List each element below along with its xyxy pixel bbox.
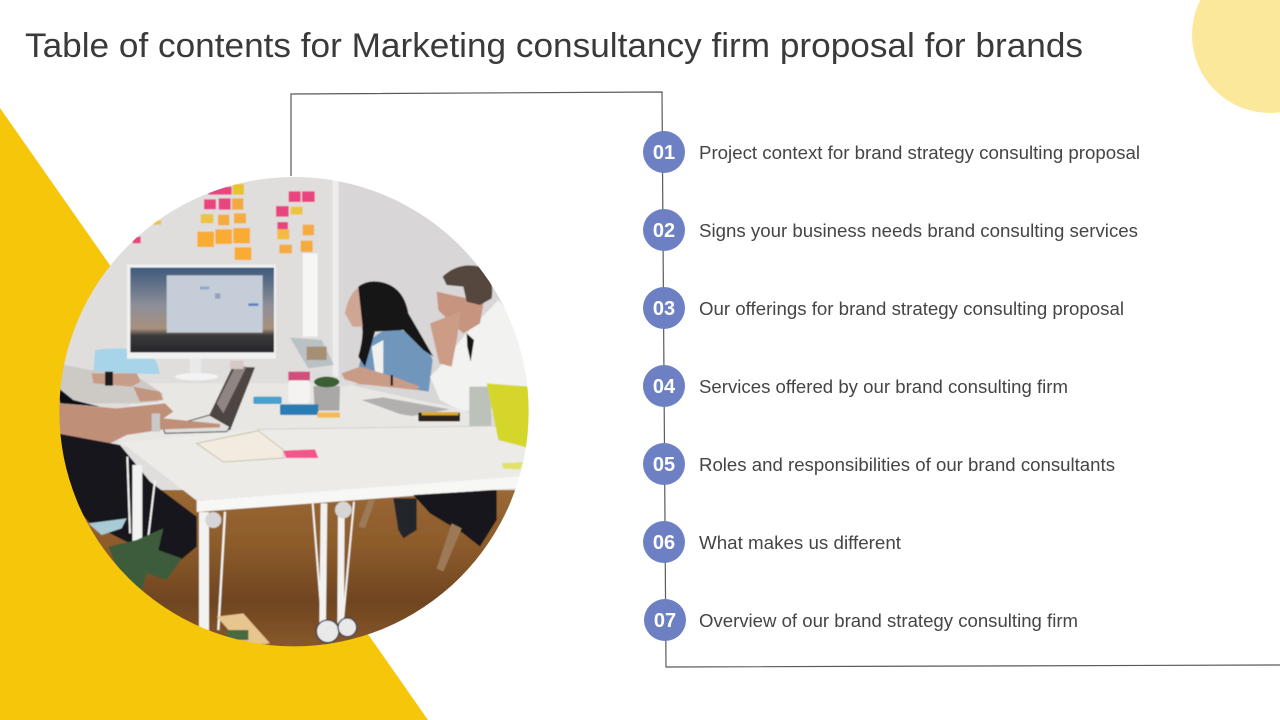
woman in denim jacket xyxy=(342,281,433,392)
connector frame line xyxy=(291,92,1280,667)
list item 04: Services offered by our brand consulting firm xyxy=(699,376,1068,397)
blue items and notes on desk xyxy=(253,397,340,418)
man in white shirt xyxy=(430,265,530,417)
list item 05 xyxy=(643,443,1115,485)
decorative yellow triangle xyxy=(0,108,428,720)
list item 05: Roles and responsibilities of our brand consultants xyxy=(699,454,1115,475)
phones and notebook on right xyxy=(418,411,461,422)
front table xyxy=(122,426,533,512)
list item 06: What makes us different xyxy=(699,532,901,553)
list item 07: Overview of our brand strategy consulting firm xyxy=(699,610,1078,631)
list item 01: Project context for brand strategy consulting proposal xyxy=(699,142,1140,163)
list item 06: 06 xyxy=(653,532,675,554)
sticky notes xyxy=(133,184,315,260)
title: Table of contents for Marketing consultancy firm proposal for brands xyxy=(25,27,1083,65)
front laptop xyxy=(163,361,255,433)
list item 04 xyxy=(643,365,1068,407)
seated people at left xyxy=(57,363,220,563)
list item 03 xyxy=(643,287,1124,329)
circular photo: team meeting xyxy=(50,170,545,650)
decorative pale yellow circle xyxy=(1192,0,1280,113)
list item 01: 01 xyxy=(653,142,675,164)
list item 07 xyxy=(644,599,1078,641)
blue chair xyxy=(93,348,160,374)
silver closed laptop xyxy=(362,397,450,416)
glass of water xyxy=(469,387,491,429)
list item 02: 02 xyxy=(653,220,675,242)
back laptop with stickers xyxy=(290,338,358,387)
far side legs and chair xyxy=(358,490,497,572)
chair at far left xyxy=(88,518,127,535)
monitor xyxy=(127,265,276,380)
list item 05: 05 xyxy=(653,454,675,476)
list item 02: Signs your business needs brand consulting services xyxy=(699,220,1138,241)
table legs and casters xyxy=(127,457,354,637)
list item 06 xyxy=(643,521,901,563)
list item 01 xyxy=(643,131,1140,173)
sunlight on floor xyxy=(217,613,270,647)
pen cup and plant xyxy=(288,372,340,411)
green plant xyxy=(108,528,182,597)
photo floor xyxy=(84,489,516,646)
list item 02 xyxy=(643,209,1138,251)
list item 07: 07 xyxy=(654,610,676,632)
list item 03: 03 xyxy=(653,298,675,320)
yellow-green laptop xyxy=(487,383,530,448)
photo wall xyxy=(60,177,516,491)
back table xyxy=(117,383,497,447)
list item 03: Our offerings for brand strategy consulting proposal xyxy=(699,298,1124,319)
notebook and pink sticky xyxy=(197,431,318,462)
casters xyxy=(205,502,357,643)
list item 04: 04 xyxy=(653,376,676,398)
